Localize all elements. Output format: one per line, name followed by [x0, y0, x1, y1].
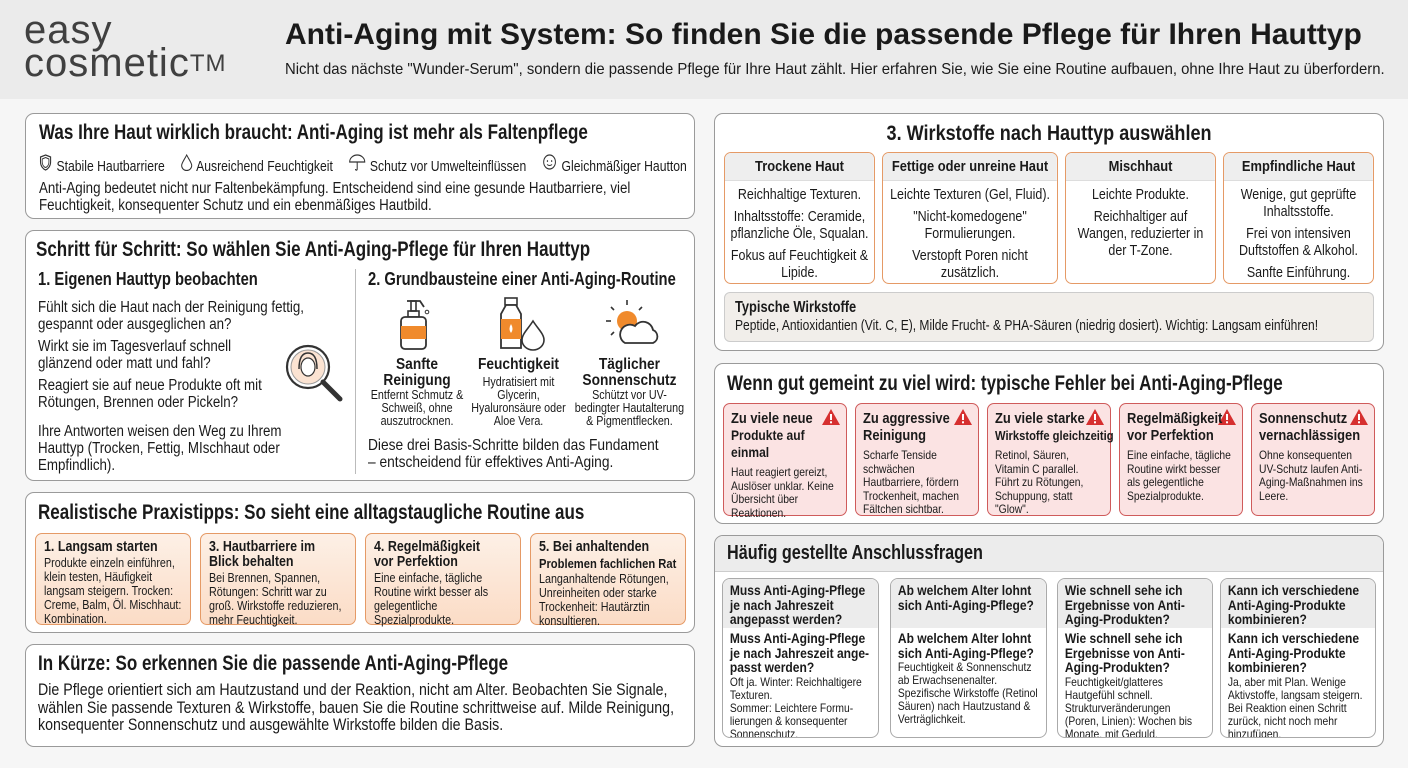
panel: Praxistipps [25, 492, 695, 633]
faq 1 [722, 578, 879, 738]
panel: Schritt für Schritt [25, 230, 695, 481]
heading [715, 536, 1383, 572]
card empfindlich: Sanfte Einführung. [1247, 265, 1350, 281]
error 4: Regelmäßigkeit [1127, 410, 1222, 427]
typische Wirkstoffe [724, 292, 1374, 342]
typische Wirkstoffe: Peptide, Antioxidantien (Vit. C, E), Milde Frucht- & PHA-Säuren (niedrig dosiert). Wichtig: Langsam einführen! [735, 318, 1318, 334]
card empfindlich: Empfindliche Haut [1242, 158, 1355, 175]
error 3: Retinol, Säuren, Vitamin C parallel. Führt zu Rötungen, Schuppung, statt "Glow". [995, 448, 1083, 516]
card misch: Leichte Produkte. [1092, 187, 1189, 203]
labels: Reinigung [383, 372, 451, 389]
footer text: Diese drei Basis-Schritte bilden das Fundament – entscheidend für effektives Anti-Aging. [368, 437, 659, 471]
faq 3 [1057, 578, 1213, 738]
faq 1: Muss Anti-Aging-Pflege je nach Jahreszeit ange-passt werden? [730, 630, 869, 675]
icon: sun cloud [606, 300, 658, 344]
faq 4 [1220, 578, 1376, 738]
labels: Hydratisiert mit Glycerin, Hyaluronsäure oder Aloe Vera. [471, 375, 566, 428]
error 5: Sonnenschutz [1259, 410, 1347, 427]
tip 4 [365, 533, 521, 625]
card misch: Reichhaltiger auf Wangen, reduzierter in der T-Zone. [1078, 209, 1203, 259]
questions: Hauttyp (Trocken, Fettig, MIschhaut oder Empfindlich). [38, 440, 280, 474]
card misch: Mischhaut [1109, 158, 1172, 175]
column 1 [38, 269, 342, 474]
typische Wirkstoffe: Typische Wirkstoffe [735, 299, 856, 316]
card fettig: Leichte Texturen (Gel, Fluid). [890, 187, 1050, 203]
icon row: Schutz vor Umwelteinflüssen [370, 158, 526, 174]
questions: Fühlt sich die Haut nach der Reinigung fettig, gespannt oder ausgeglichen an? Wirkt sie im Tagesverlauf schnell [38, 299, 304, 355]
tip 3: Bei Brennen, Spannen, Rötungen: Schritt war zu groß. Wirkstoffe reduzieren, mehr Feuchtigkeit. [209, 571, 341, 627]
divider [355, 269, 356, 474]
panel: FAQ [714, 535, 1384, 747]
card fettig: Verstopft Poren nicht zusätzlich. [912, 248, 1028, 281]
tip 5: 5. Bei anhaltenden [539, 539, 649, 555]
faq 3: Wie schnell sehe ich Ergebnisse von Anti-Aging-Produkten? [1065, 630, 1185, 675]
card misch [1065, 152, 1216, 284]
card empfindlich [1223, 152, 1374, 284]
error 2 [855, 403, 979, 516]
faq 1: Muss Anti-Aging-Pflege je nach Jahreszeit angepasst werden? [730, 582, 865, 627]
summary text: Die Pflege orientiert sich am Hautzustand und der Reaktion, nicht am Alter. Beobachten Sie Signale, wählen Sie passende Texturen & Wirkstoffe, bauen Sie die Routine schrittweise auf. Milde Reinigung, konsequenter Sonnenschutz und ausgewählte Wirkstoffe bilden die Basis. [38, 681, 674, 734]
card fettig: Fettige oder unreine Haut [892, 158, 1048, 175]
questions [38, 299, 304, 474]
faq 4: Kann ich verschiedene Anti-Aging-Produkte kombinieren? [1228, 630, 1359, 675]
tip 5: Problemen fachlichen Rat [539, 556, 676, 571]
card fettig [882, 152, 1058, 284]
labels: Sanfte [396, 356, 438, 373]
error 3: Wirkstoffe gleichzeitig [995, 428, 1114, 443]
card trocken: Reichhaltige Texturen. [738, 187, 861, 203]
error 3: Zu viele starke [995, 410, 1085, 427]
subheading: 1. Eigenen Hauttyp beobachten [38, 269, 258, 289]
panel: Wirkstoffe nach Hauttyp [714, 113, 1384, 351]
error 5 [1251, 403, 1375, 516]
card empfindlich: Wenige, gut geprüfte Inhaltsstoffe. [1241, 187, 1356, 220]
labels: Feuchtigkeit [478, 356, 559, 373]
header band [0, 0, 1408, 99]
icon row: Gleichmäßiger Hautton [562, 159, 687, 175]
questions: glänzend oder matt und fahl? Reagiert sie auf neue Produkte oft mit [38, 355, 262, 394]
faq 2: Ab welchem Alter lohnt sich Anti-Aging-Pflege? [898, 630, 1034, 660]
icon row: Ausreichend Feuchtigkeit [196, 158, 333, 174]
icon: pump [400, 300, 430, 350]
error 1: Zu viele neue [731, 410, 813, 427]
faq 1: Oft ja. Winter: Reichhaltigere Texturen. [730, 674, 862, 702]
faq 2: Ab welchem Alter lohnt sich Anti-Aging-Pflege? [898, 582, 1034, 612]
error 1 [723, 403, 847, 516]
card fettig: "Nicht-komedogene" Formulierungen. [913, 209, 1027, 242]
labels: Täglicher [599, 356, 660, 373]
tip 5: Langanhaltende Rötungen, Unreinheiten oder starke Trockenheit: Hautärztin konsultieren. [539, 572, 669, 628]
faq 4: Kann ich verschiedene Anti-Aging-Produkte kombinieren? [1228, 582, 1359, 627]
error 4 [1119, 403, 1243, 516]
error 2: Reinigung [863, 427, 926, 444]
error 4: Eine einfache, tägliche Routine wirkt besser als gelegentliche Spezialprodukte. [1127, 448, 1231, 502]
panel: Was Ihre Haut braucht [25, 113, 695, 219]
tip 5 [530, 533, 686, 625]
error 4: vor Perfektion [1127, 427, 1214, 444]
labels [371, 356, 684, 428]
card trocken [724, 152, 875, 284]
error 2: Scharfe Tenside schwächen Hautbarriere, fördern Trockenheit, machen Fältchen sichtbar. [863, 448, 959, 516]
icon: bottle + drop [500, 297, 545, 351]
panel: typische Fehler [714, 363, 1384, 524]
tip 1 [35, 533, 191, 625]
card trocken: Fokus auf Feuchtigkeit & Lipide. [731, 248, 868, 281]
heading: Wenn gut gemeint zu viel wird: typische Fehler bei Anti-Aging-Pflege [727, 372, 1283, 395]
heading: Realistische Praxistipps: So sieht eine alltagstaugliche Routine aus [38, 501, 584, 524]
tip 1: 1. Langsam starten [44, 539, 158, 555]
labels: Entfernt Schmutz & Schweiß, ohne auszutrocknen. [371, 388, 463, 428]
faq 3: Wie schnell sehe ich Ergebnisse von Anti-Aging-Produkten? [1065, 582, 1185, 627]
heading: Schritt für Schritt: So wählen Sie Anti-Aging-Pflege für Ihren Hauttyp [36, 238, 590, 261]
error 5: Ohne konsequenten UV-Schutz laufen Anti-Aging-Maßnahmen ins Leere. [1259, 448, 1363, 502]
error 3 [987, 403, 1111, 516]
labels: Schützt vor UV-bedingter Hautalterung & Pigmentflecken. [575, 388, 684, 428]
icon row [40, 154, 687, 175]
heading: 3. Wirkstoffe nach Hauttyp auswählen [887, 122, 1212, 145]
logo [24, 8, 226, 85]
subtitle: Nicht das nächste "Wunder-Serum", sondern die passende Pflege für Ihre Haut zählt. Hier erfahren Sie, wie Sie eine Routine aufbauen, ohne Ihre Haut zu überfordern. [285, 61, 1385, 78]
tip 1: Produkte einzeln einführen, klein testen, Häufigkeit langsam steigern. Trocken: Creme, Balm, Öl. Mischhaut: Kombination. [44, 556, 181, 626]
error 1: Produkte auf einmal [731, 427, 805, 460]
icon: magnifier face [286, 344, 342, 402]
logo: cosmeticTM [24, 41, 226, 85]
tip 4: vor Perfektion [374, 554, 458, 570]
card trocken: Trockene Haut [755, 158, 844, 175]
icon row: Stabile Hautbarriere [56, 158, 165, 174]
title: Anti-Aging mit System: So finden Sie die passende Pflege für Ihren Hauttyp [285, 18, 1362, 51]
error 5: vernachlässigen [1259, 427, 1360, 444]
faq 2: Feuchtigkeit & Sonnenschutz ab Erwachsenenalter. Spezifische Wirkstoffe (Retinol Säuren) nach Hautzustand & Verträglichkeit. [898, 660, 1038, 726]
error 2: Zu aggressive [863, 410, 950, 427]
subheading: 2. Grundbausteine einer Anti-Aging-Routine [368, 269, 676, 289]
tip 3 [200, 533, 356, 625]
faq 2 [890, 578, 1047, 738]
tip 3: 3. Hautbarriere im Blick behalten [209, 539, 315, 570]
heading: Was Ihre Haut wirklich braucht: Anti-Aging ist mehr als Faltenpflege [39, 121, 588, 144]
panel: In Kürze [25, 644, 695, 747]
heading: Häufig gestellte Anschlussfragen [727, 542, 983, 564]
column 2 [368, 269, 684, 471]
tip 4: Eine einfache, tägliche Routine wirkt besser als gelegentliche Spezialprodukte. [374, 571, 488, 627]
body text: Anti-Aging bedeutet nicht nur Faltenbekämpfung. Entscheidend sind eine gesunde Hautbarriere, viel Feuchtigkeit, konsequenter Schutz und ein ebenmäßiges Hautbild. [39, 180, 630, 214]
tip 4: 4. Regelmäßigkeit [374, 539, 480, 555]
logo: easy [24, 8, 112, 52]
error 1: Haut reagiert gereizt, Auslöser unklar. Keine Übersicht über Reaktionen. [731, 465, 834, 520]
card trocken: Inhaltsstoffe: Ceramide, pflanzliche Öle, Squalan. [731, 209, 868, 242]
questions: Rötungen, Brennen oder Pickeln? Ihre Antworten weisen den Weg zu Ihrem [38, 394, 282, 440]
labels: Sonnenschutz [582, 372, 676, 389]
card empfindlich: Frei von intensiven Duftstoffen & Alkohol. [1239, 226, 1358, 259]
heading: In Kürze: So erkennen Sie die passende Anti-Aging-Pflege [38, 652, 508, 675]
